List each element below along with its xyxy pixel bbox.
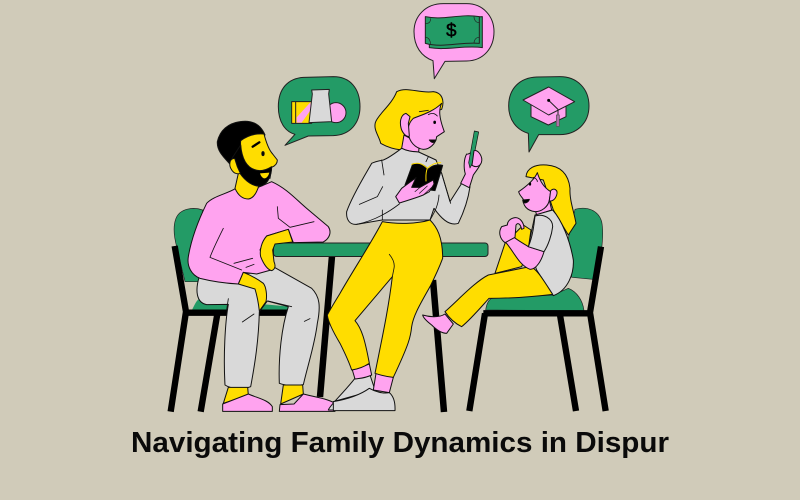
man figure [188, 121, 335, 411]
woman raised fingers [472, 151, 482, 167]
girl figure [423, 165, 576, 333]
groceries box [292, 102, 312, 123]
girl trousers [445, 267, 553, 327]
groceries bag [309, 89, 332, 123]
man trousers [197, 268, 319, 388]
girl face [519, 173, 551, 212]
book [405, 164, 443, 191]
woman socks [352, 364, 393, 393]
graduation cap base [531, 103, 566, 125]
man ear [230, 158, 240, 174]
man sweater folds [210, 207, 314, 322]
woman figure [327, 90, 482, 411]
man mouth [260, 173, 269, 178]
girl hair [526, 165, 576, 235]
man face [241, 134, 277, 178]
title: Navigating Family Dynamics in Dispur [131, 427, 669, 459]
woman hair [375, 90, 443, 150]
girl hand [500, 218, 524, 243]
woman sweater folds [357, 157, 451, 224]
woman raised hand [461, 152, 481, 188]
man eye and brow [253, 142, 259, 147]
man neck [235, 173, 260, 199]
man lower hand [238, 272, 267, 311]
woman front shoe [333, 388, 395, 411]
man sweater [188, 182, 330, 284]
woman finger lines [415, 186, 432, 195]
graduation tassel [549, 100, 558, 126]
girl neck [535, 200, 552, 215]
woman back shoe [328, 375, 375, 410]
girl eye brow mouth [523, 177, 537, 203]
girl raised knee [495, 225, 531, 273]
woman eye brow mouth [419, 110, 437, 142]
bubble: education [509, 77, 589, 152]
girl arm [505, 236, 544, 269]
man socks and shoes [223, 385, 335, 411]
man hair [217, 121, 265, 166]
girl ear [549, 189, 557, 201]
table [274, 243, 488, 412]
woman neck [402, 135, 419, 152]
pencil [469, 131, 479, 168]
woman ear [400, 113, 410, 136]
speech bubbles [278, 4, 589, 152]
left chair [171, 208, 290, 412]
graduation cap top [523, 87, 575, 115]
girl foot [423, 314, 453, 333]
man upper hand [260, 229, 293, 271]
bubble: money [414, 4, 494, 79]
girl sleeve [528, 215, 553, 252]
woman trouser crease [389, 254, 394, 277]
right chair [469, 208, 606, 411]
woman face [408, 103, 444, 149]
woman trousers [327, 220, 443, 377]
girl shirt [528, 210, 573, 296]
dollar sign: $ [446, 20, 457, 41]
bubble: groceries [278, 77, 360, 145]
groceries ball [326, 103, 346, 123]
woman sweater [347, 148, 470, 224]
woman lower hand [396, 178, 434, 203]
book gold trim [412, 163, 441, 181]
man beard [232, 145, 272, 186]
